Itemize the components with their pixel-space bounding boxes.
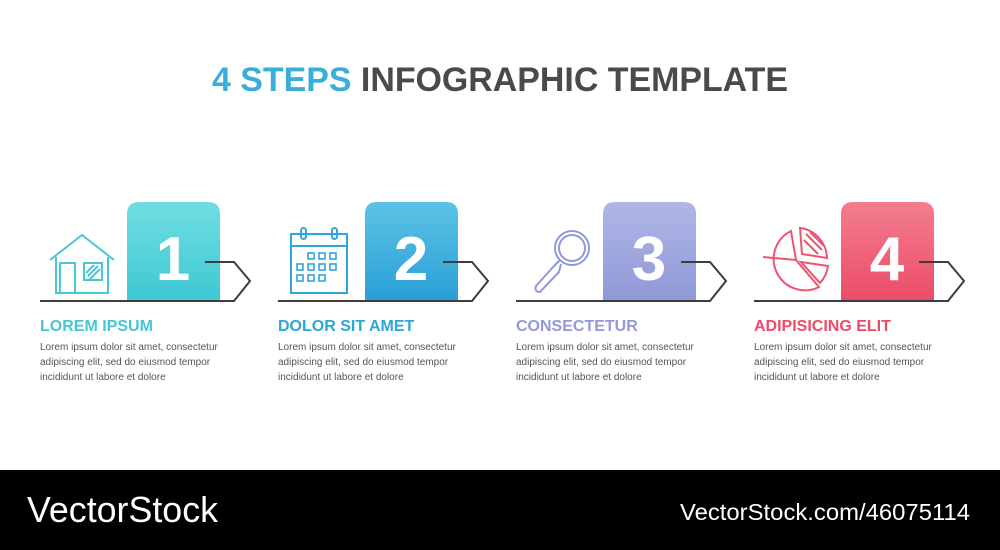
text 2: Lorem ipsum dolor sit amet, consectetur (278, 342, 457, 353)
number box 3 (603, 202, 696, 301)
number box 1 (127, 202, 220, 301)
arrow line (40, 262, 250, 301)
text 1: incididunt ut labore et dolore (40, 372, 166, 383)
icon: pie chart (763, 228, 828, 290)
number box 1: 1 (156, 225, 190, 294)
footer logo text: VectorStock (27, 489, 219, 530)
text 1: Lorem ipsum dolor sit amet, consectetur (40, 342, 219, 353)
heading 4: ADIPISICING ELIT (754, 318, 891, 335)
step 3 (516, 202, 726, 383)
number box 4: 4 (870, 225, 905, 294)
heading 1: LOREM IPSUM (40, 318, 153, 335)
text 3: Lorem ipsum dolor sit amet, consectetur (516, 342, 695, 353)
text 2: incididunt ut labore et dolore (278, 372, 404, 383)
icon: house (50, 235, 114, 293)
number box 2 (365, 202, 458, 301)
text 4: adipiscing elit, sed do eiusmod tempor (754, 357, 925, 368)
icon: calendar (291, 228, 347, 293)
text 3: incididunt ut labore et dolore (516, 372, 642, 383)
text 4: incididunt ut labore et dolore (754, 372, 880, 383)
heading 2: DOLOR SIT AMET (278, 318, 415, 335)
text 3: adipiscing elit, sed do eiusmod tempor (516, 357, 687, 368)
footer url: VectorStock.com/46075114 (680, 499, 970, 525)
step 4 (754, 202, 964, 383)
text 1: adipiscing elit, sed do eiusmod tempor (40, 357, 211, 368)
number box 2: 2 (394, 225, 428, 294)
step 1 (40, 202, 250, 383)
number box 4 (841, 202, 934, 301)
text 2: adipiscing elit, sed do eiusmod tempor (278, 357, 449, 368)
footer bar (0, 470, 1000, 550)
arrow line (516, 262, 726, 301)
step 2 (278, 202, 488, 383)
number box 3: 3 (632, 225, 666, 294)
title: 4 STEPS INFOGRAPHIC TEMPLATE (212, 61, 788, 99)
arrow line (278, 262, 488, 301)
arrow line (754, 262, 964, 301)
icon: magnifier (536, 231, 589, 292)
heading 3: CONSECTETUR (516, 318, 638, 335)
text 4: Lorem ipsum dolor sit amet, consectetur (754, 342, 933, 353)
